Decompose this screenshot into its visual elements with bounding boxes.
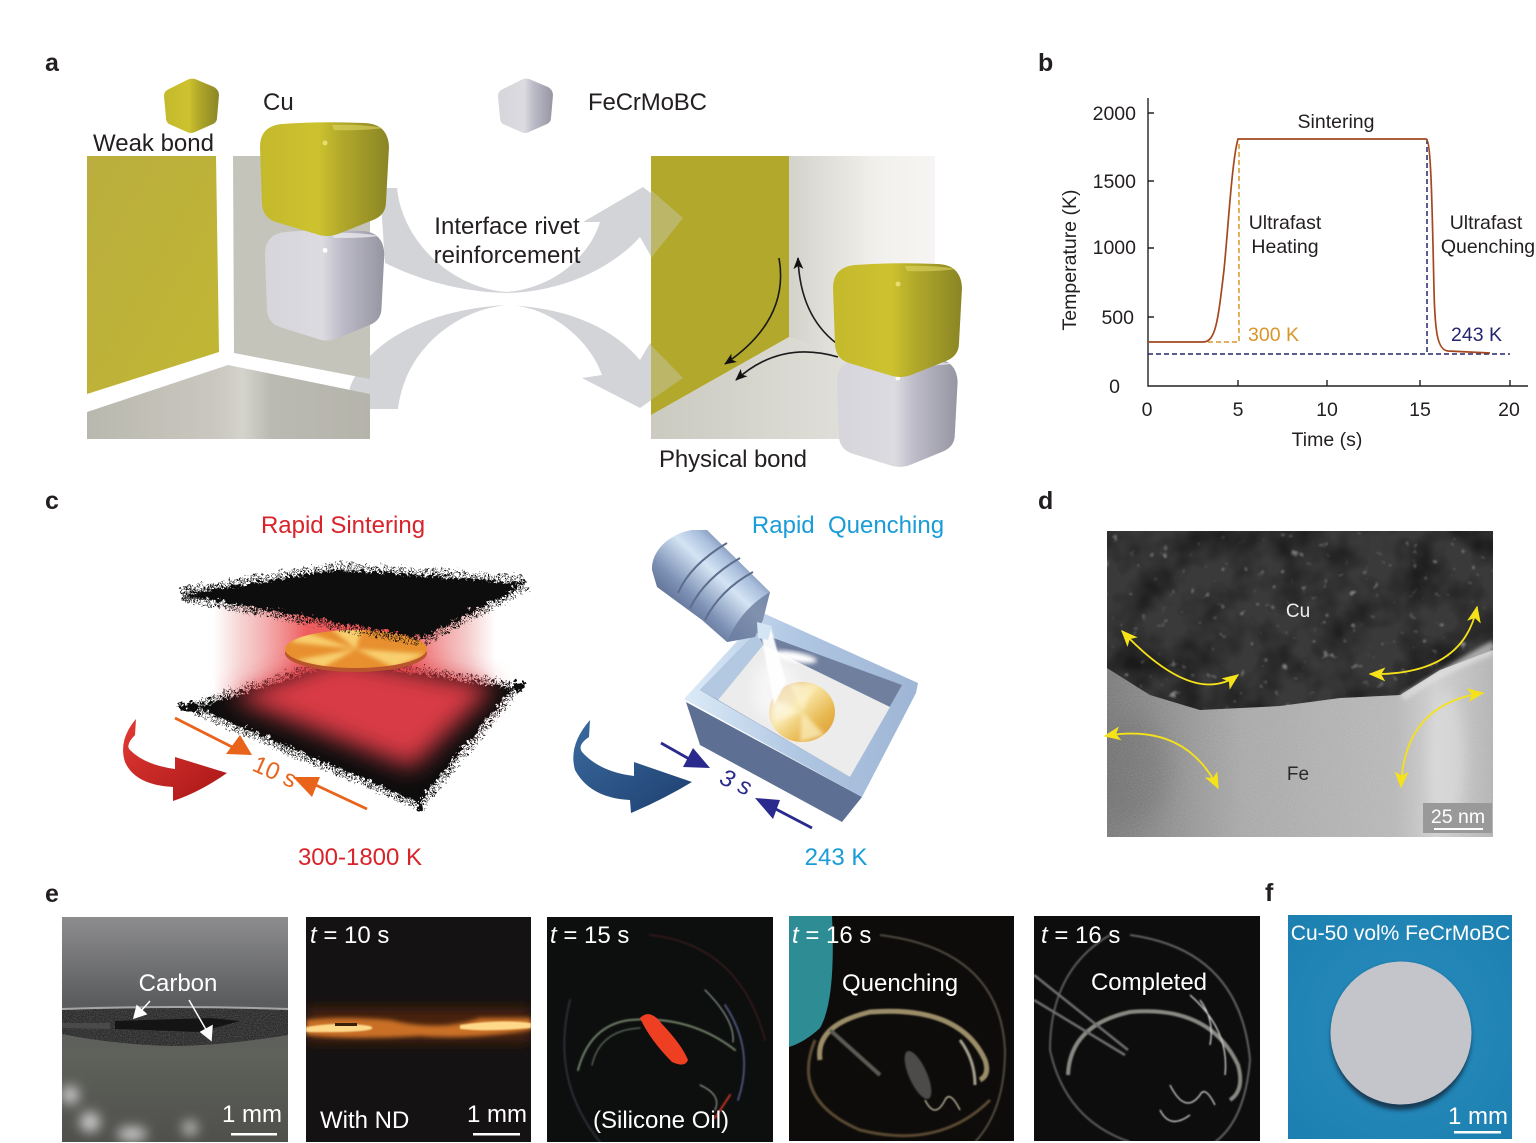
heading: rapid quenching: Rapid Quenching <box>752 512 944 539</box>
chart: reference and guide dashed lines <box>1148 139 1510 354</box>
cube: joined Cu <box>833 263 962 377</box>
label: physical bond: Physical bond <box>659 446 807 473</box>
sample disk <box>285 628 427 672</box>
arrows: stress transfer curves <box>725 258 838 380</box>
arrows: carbon pointers <box>134 1000 212 1040</box>
photo 5: completed <box>1034 916 1260 1142</box>
icon: Cu legend cube <box>164 79 219 133</box>
arrows: 10 s orange pair <box>175 718 367 809</box>
label: t = 16 s: t = 16 s <box>1041 922 1120 949</box>
panel e: process photographs <box>45 880 1260 1142</box>
label: carbon: Carbon <box>139 970 217 997</box>
annotation: ultrafast heating: Ultrafast <box>1249 212 1322 234</box>
pouring liquid and vapour <box>753 628 818 720</box>
annotation: ultrafast quenching <box>1441 212 1535 258</box>
label: Cu: Cu <box>1286 601 1310 622</box>
icon: FeCrMoBC legend cube <box>498 79 553 133</box>
y axis tick labels: 500 <box>1101 307 1134 329</box>
photo 3: sample in silicone oil <box>547 917 773 1142</box>
label: t = 10 s: t = 10 s <box>310 922 389 949</box>
text: interface rivet reinforcement: reinforcement <box>434 242 581 269</box>
y axis tick labels: 2000 <box>1093 103 1136 125</box>
scale bar: 1 mm: 1 mm <box>222 1101 282 1128</box>
y axis tick labels: 1500 <box>1093 171 1136 193</box>
annotation: ultrafast heating <box>1249 212 1322 258</box>
x axis tick labels <box>1142 399 1520 421</box>
heading: rapid sintering: Rapid Sintering <box>261 512 425 539</box>
scale bar: 25 nm <box>1423 803 1492 833</box>
label: completed: Completed <box>1091 969 1207 996</box>
icon: blue rotation arrow <box>573 720 692 813</box>
label: 10 s: 10 s <box>249 751 301 794</box>
FeCrMoBC wall: left separated wall <box>233 156 370 379</box>
cube: stacked FeCrMoBC <box>265 230 384 341</box>
annotation: ultrafast heating: Heating <box>1251 236 1319 258</box>
text: interface rivet reinforcement: Interface rivet <box>434 213 580 240</box>
panel a: interface rivet schematic <box>45 49 962 473</box>
panel label b: b <box>1038 49 1053 77</box>
scale bar: 25 nm: 25 nm <box>1431 806 1485 828</box>
scale bar: 1 mm: 1 mm <box>1448 1103 1508 1130</box>
cube: joined FeCrMoBC <box>837 358 958 467</box>
x axis tick labels: 5 <box>1233 399 1244 421</box>
sample disk <box>1330 962 1472 1104</box>
panel f: finished sample photograph <box>1265 879 1512 1139</box>
y axis tick labels: 0 <box>1109 376 1120 398</box>
annotation: sintering: Sintering <box>1298 111 1374 133</box>
chart: temperature curve <box>1148 139 1490 353</box>
chart axes <box>1148 98 1528 386</box>
label: 3 s: 3 s <box>716 764 756 802</box>
photo 4: quenching <box>789 916 1014 1142</box>
photo 2: heating at t = 10 s <box>306 917 531 1142</box>
panel label c: c <box>45 487 59 515</box>
annotation: ultrafast quenching: Ultrafast <box>1450 212 1523 234</box>
x axis tick labels: 20 <box>1498 399 1520 421</box>
Cu wall: left separated wall <box>87 156 219 394</box>
label: 300-1800 K: 300-1800 K <box>298 844 422 871</box>
label: weak bond: Weak bond <box>93 130 214 157</box>
label: silicone oil: (Silicone Oil) <box>593 1107 729 1134</box>
y axis tick labels: 1000 <box>1093 237 1136 259</box>
panel label e: e <box>45 880 59 908</box>
label: with ND: With ND <box>320 1107 409 1134</box>
x axis tick labels: 0 <box>1142 399 1153 421</box>
label: composition: Cu-50 vol% FeCrMoBC <box>1291 922 1510 945</box>
scale bar: 1 mm: 1 mm <box>467 1101 527 1128</box>
x axis tick labels: 10 <box>1316 399 1338 421</box>
y axis tick labels <box>1093 103 1136 398</box>
label: quenching: Quenching <box>842 970 958 997</box>
sample disk in coolant <box>769 682 835 742</box>
label: FeCrMoBC: FeCrMoBC <box>588 89 707 116</box>
label: 243 K: 243 K <box>805 844 867 871</box>
label: t = 15 s: t = 15 s <box>550 922 629 949</box>
label: Cu: Cu <box>263 89 294 116</box>
y axis title: Temperature (K) <box>1059 190 1081 330</box>
red glow between carbon heaters <box>213 605 495 700</box>
panel d: TEM micrograph <box>1038 487 1493 837</box>
icon: red rotation arrow <box>123 719 227 801</box>
cube: stacked Cu <box>260 122 389 236</box>
joined walls and floor <box>651 156 935 439</box>
label: Fe: Fe <box>1287 764 1309 785</box>
panel b: temperature profile chart <box>1038 49 1535 451</box>
blue background <box>1288 915 1512 1139</box>
sample shadow <box>1331 964 1471 1110</box>
photo 1: carbon heaters <box>61 917 288 1142</box>
annotation: ultrafast quenching: Quenching <box>1441 236 1535 258</box>
top carbon heater <box>180 567 523 636</box>
arrows: 3 s navy pair <box>661 743 812 828</box>
label: t = 16 s: t = 16 s <box>792 922 871 949</box>
panel label a: a <box>45 49 60 77</box>
text: interface rivet reinforcement <box>434 213 581 269</box>
floor: left separated floor <box>87 365 370 439</box>
bottom carbon heater <box>194 655 510 800</box>
x axis title: Time (s) <box>1292 429 1362 451</box>
panel c: rapid sintering and quenching schematic <box>45 487 944 871</box>
annotation: 243 K: 243 K <box>1451 324 1502 346</box>
tray with coolant <box>684 613 918 822</box>
panel label f: f <box>1265 879 1274 907</box>
panel label d: d <box>1038 487 1053 515</box>
arrow: upper curved grey arrow <box>380 187 683 293</box>
yellow arc arrows <box>1105 607 1483 788</box>
micrograph image <box>1090 531 1493 837</box>
x axis tick labels: 15 <box>1409 399 1431 421</box>
annotation: 300 K: 300 K <box>1248 324 1299 346</box>
liquid nitrogen bottle <box>652 530 772 642</box>
arrow: lower curved grey arrow <box>347 305 683 409</box>
